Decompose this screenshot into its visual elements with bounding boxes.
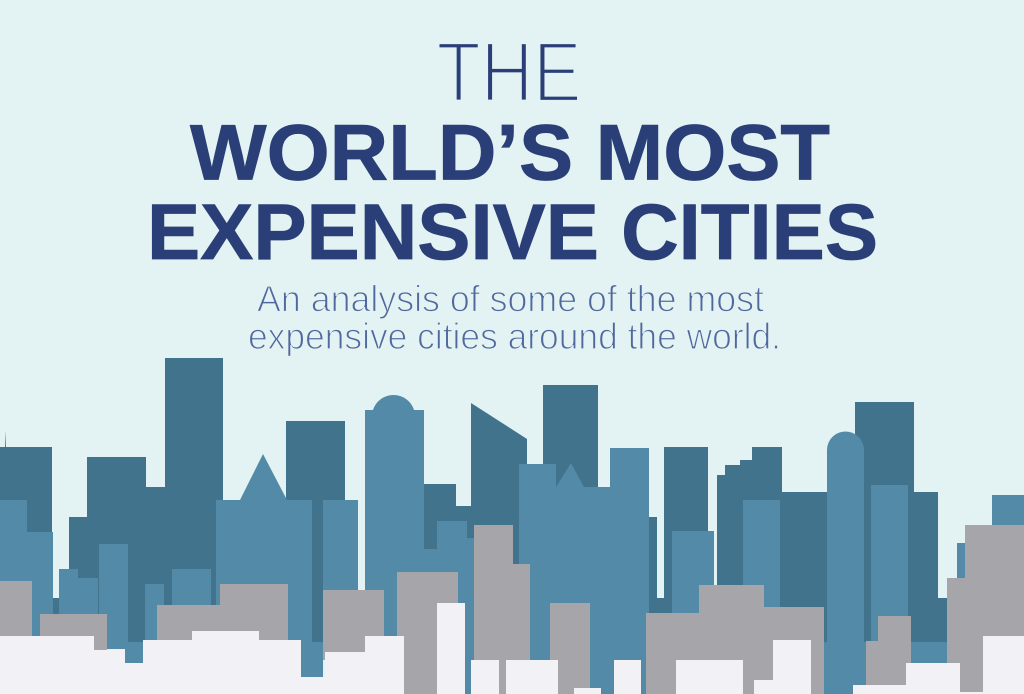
skyline: dark back buildings (0, 358, 947, 642)
subtitle (248, 278, 781, 357)
title block (147, 26, 878, 276)
skyline illustration (0, 358, 1024, 694)
subtitle: An analysis of some of the most (257, 278, 765, 320)
title: WORLD'S MOST: WORLD’S MOST (190, 108, 830, 196)
subtitle: expensive cities around the world. (248, 316, 781, 357)
skyline: mid-blue buildings (0, 395, 1024, 694)
title: THE: THE (436, 26, 582, 120)
title: EXPENSIVE CITIES: EXPENSIVE CITIES (147, 187, 878, 276)
skyline: grey mid-ground buildings (0, 525, 1024, 694)
skyline: pale foreground buildings (0, 603, 1024, 694)
